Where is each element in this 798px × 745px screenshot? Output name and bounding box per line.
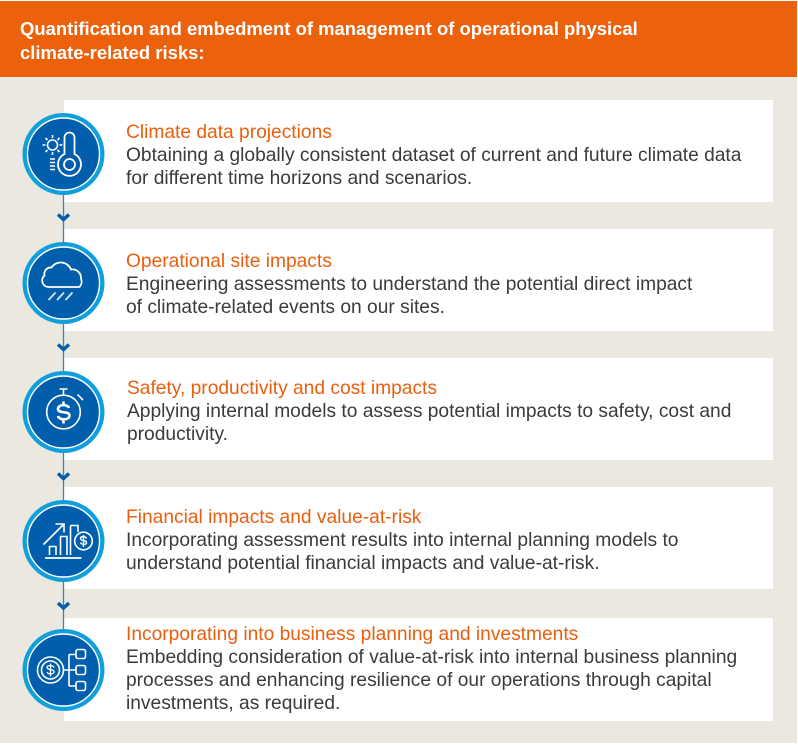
- card: operational site impacts: of climate-related events on our sites.: [126, 297, 445, 318]
- card: business planning and investments: Embedding consideration of value-at-risk into internal business planning: [126, 647, 737, 668]
- card: climate data projections: [64, 100, 773, 202]
- card: safety, productivity and cost impacts: productivity.: [127, 424, 228, 445]
- icon: stopwatch with dollar: [22, 371, 104, 453]
- card: operational site impacts: Engineering assessments to understand the potential direct impact: [126, 274, 692, 295]
- header banner: [0, 1, 797, 77]
- card: operational site impacts: [64, 229, 773, 331]
- card: climate data projections: for different time horizons and scenarios.: [126, 168, 472, 189]
- arrow 2: [58, 344, 69, 350]
- card: financial impacts and value-at-risk: [64, 487, 773, 589]
- icon: thermometer and sun: [22, 113, 104, 195]
- card: business planning and investments: investments, as required.: [126, 693, 340, 714]
- card: safety, productivity and cost impacts: [64, 358, 773, 460]
- header banner: climate-related risks:: [20, 42, 204, 63]
- connector line: [62, 154, 64, 670]
- icon: rain cloud: [22, 242, 104, 324]
- icon: coin and branching nodes: [22, 629, 104, 711]
- card: financial impacts and value-at-risk: Incorporating assessment results into internal planning models to: [126, 530, 678, 551]
- card: business planning and investments: [64, 618, 773, 721]
- card: operational site impacts: Operational site impacts: [126, 251, 332, 272]
- arrow 3: [58, 474, 69, 478]
- card: safety, productivity and cost impacts: Applying internal models to assess potential impacts to safety, cost and: [127, 401, 731, 422]
- card: safety, productivity and cost impacts: Safety, productivity and cost impacts: [127, 378, 437, 399]
- header banner: Quantification and embedment of management of operational physical: [20, 18, 638, 39]
- arrow 4: [58, 603, 69, 608]
- card: financial impacts and value-at-risk: Financial impacts and value-at-risk: [126, 507, 421, 528]
- arrow 1: [58, 214, 69, 220]
- card: business planning and investments: processes and enhancing resilience of our operations through capital: [126, 670, 712, 691]
- card: financial impacts and value-at-risk: understand potential financial impacts and value-at-risk.: [126, 553, 600, 574]
- card: business planning and investments: Incorporating into business planning and investments: [126, 624, 578, 645]
- icon: bar chart with dollar coin: [22, 500, 104, 582]
- card: climate data projections: Climate data projections: [126, 122, 332, 143]
- card: climate data projections: Obtaining a globally consistent dataset of current and future climate data: [126, 145, 741, 166]
